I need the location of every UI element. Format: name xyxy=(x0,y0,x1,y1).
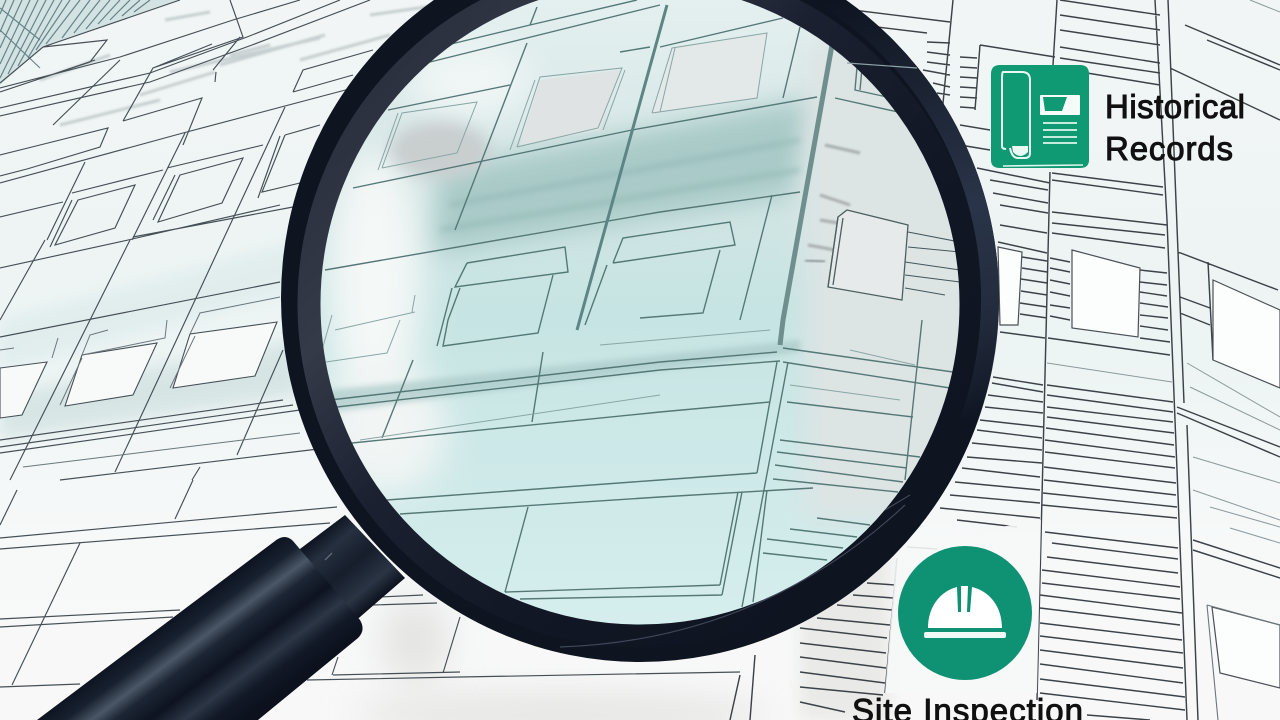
lens: right magnified window xyxy=(828,210,908,300)
icon: site inspection hard hat xyxy=(898,546,1032,680)
record card xyxy=(1040,95,1080,115)
lens: magnified facade lines xyxy=(325,0,953,607)
sketch strokes: left facade xyxy=(0,0,740,687)
sketch strokes: smudges xyxy=(40,5,440,125)
handle grip xyxy=(37,537,363,720)
icon: historical records book xyxy=(991,65,1089,168)
sketch strokes: left windows xyxy=(0,322,277,418)
white panel behind inspection icon xyxy=(885,520,1041,693)
book spine xyxy=(1002,72,1030,158)
record text lines xyxy=(1043,123,1077,143)
handle neck xyxy=(288,515,405,630)
magnifying glass handle xyxy=(37,515,405,720)
sketch strokes: right windows xyxy=(998,247,1280,688)
label: historical records: Historical xyxy=(1105,88,1245,125)
label: historical records: Records xyxy=(1105,130,1233,167)
lens: thick mullions xyxy=(577,5,667,330)
lens: dark reflective band xyxy=(425,95,825,255)
sketch strokes: right facade xyxy=(730,0,1280,720)
label: historical records xyxy=(1105,88,1245,167)
magnifying glass ring xyxy=(281,0,999,662)
magnifying glass lens xyxy=(310,0,975,640)
